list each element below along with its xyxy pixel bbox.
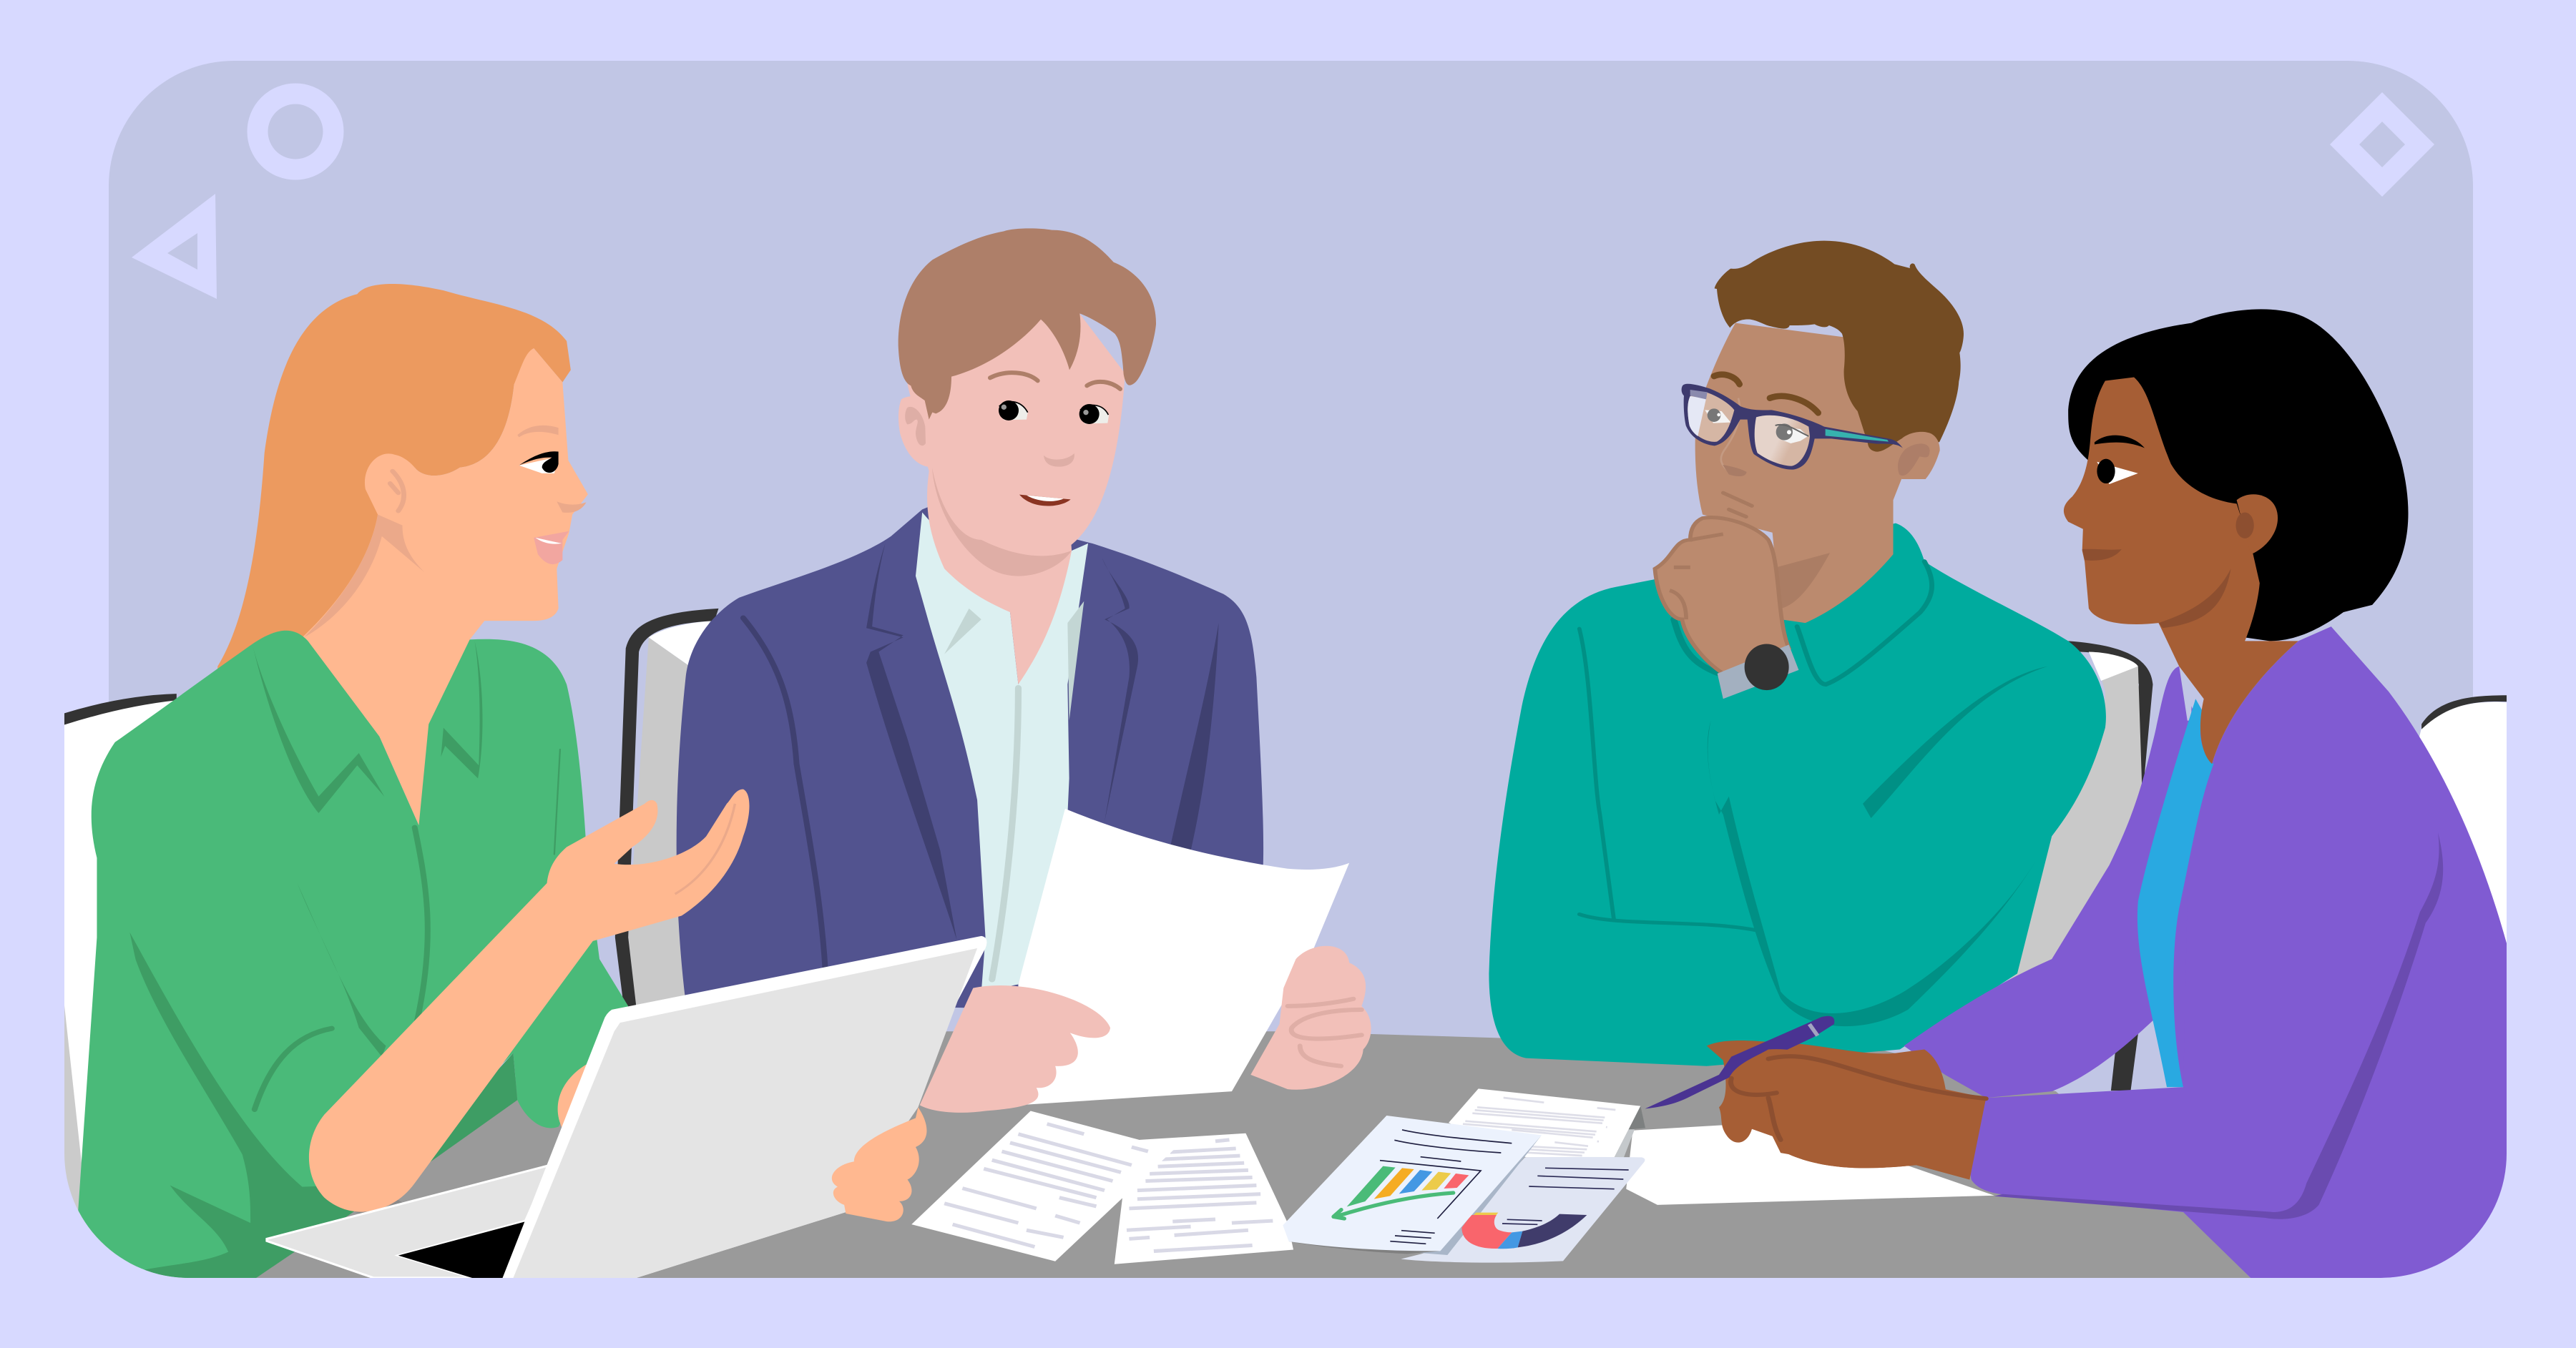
mouth — [2082, 549, 2122, 561]
pupil — [2097, 459, 2115, 483]
right highlight — [1787, 430, 1791, 434]
chest fold — [1863, 666, 2047, 818]
held paper — [1018, 809, 1349, 1105]
pointing hand — [920, 985, 1110, 1113]
eyebrows — [1714, 375, 1818, 413]
shirt creases — [255, 749, 560, 1109]
left eye white — [999, 403, 1028, 420]
mouth — [1019, 495, 1071, 506]
document: stack with charts — [1283, 1088, 1645, 1263]
left chair — [64, 694, 177, 1254]
person: man in blue jacket — [677, 228, 1263, 1010]
document: left pair — [911, 1111, 1293, 1264]
eye white — [519, 457, 559, 473]
decoration: ring — [258, 94, 333, 169]
raised arm and hand — [309, 789, 750, 1212]
donut: blue — [1497, 1231, 1522, 1249]
donut sheet — [1401, 1157, 1645, 1263]
palm crease — [675, 804, 735, 894]
bar: green — [1347, 1166, 1396, 1206]
knuckle lines — [1731, 1056, 1986, 1140]
right eye — [1778, 427, 1808, 443]
upper lid — [1776, 425, 1808, 436]
hand on chin — [1655, 518, 1789, 674]
upper lids — [999, 402, 1108, 415]
shirt placket — [992, 688, 1018, 979]
chin shadow — [2159, 569, 2231, 628]
watch face — [1745, 644, 1789, 690]
shirt — [78, 631, 628, 1278]
nose shadow — [557, 501, 587, 513]
back hand — [1707, 1040, 1986, 1179]
donut: yellow — [1474, 1213, 1498, 1215]
left lapel fold — [866, 543, 956, 940]
right pupil — [1079, 404, 1100, 424]
table — [256, 1031, 2251, 1278]
person: woman in purple — [1645, 309, 2507, 1278]
right iris — [1776, 423, 1793, 441]
keyboard gap — [398, 1221, 526, 1278]
far right chair — [2419, 695, 2507, 943]
top sheet text lines — [1463, 1098, 1615, 1156]
ear — [1901, 432, 1940, 479]
top sheet shadow — [1629, 1106, 1645, 1129]
body and face — [1489, 323, 2106, 1066]
cardigan fold — [1994, 832, 2443, 1219]
eye lid and pupil — [519, 451, 559, 473]
donut sheet text lines — [1502, 1168, 1629, 1224]
left highlight — [1001, 405, 1007, 410]
hair — [898, 228, 1156, 420]
lid frame — [503, 936, 986, 1278]
laptop — [267, 936, 986, 1278]
right lapel fold — [1102, 558, 1138, 822]
body — [677, 308, 1263, 1010]
white sheet under hands — [1626, 1122, 1994, 1205]
neck and face — [1695, 323, 1920, 623]
top — [2137, 699, 2213, 1087]
head details — [1682, 241, 1964, 479]
ear inner — [1898, 443, 1930, 476]
eyebrows — [990, 373, 1120, 389]
lid face — [513, 948, 977, 1278]
left highlight — [1717, 413, 1720, 416]
cardigan left panel — [1904, 666, 2188, 1098]
middle chair — [615, 609, 718, 1010]
eye white — [2097, 462, 2138, 484]
eyebrow — [2095, 436, 2145, 448]
left pupil — [999, 400, 1019, 420]
hair — [217, 284, 571, 677]
shirt — [916, 512, 1088, 992]
nose — [1721, 398, 1740, 473]
collar shading — [944, 601, 1084, 721]
hair — [1715, 241, 1964, 452]
left lens top — [1690, 390, 1708, 399]
jacket — [677, 503, 1263, 1010]
long sleeve fold — [1708, 721, 2035, 1026]
teeth — [1027, 496, 1064, 501]
cardigan back fill — [2153, 721, 2204, 1087]
left lens — [1688, 392, 1734, 442]
far hand — [558, 1064, 587, 1129]
ear — [898, 396, 932, 467]
nostril — [1723, 465, 1747, 476]
finger lines — [1670, 534, 1723, 619]
sweater — [1489, 523, 2106, 1066]
watch band — [1718, 644, 1798, 699]
left eye — [1705, 410, 1730, 423]
scene — [57, 228, 2507, 1284]
glasses frame — [1682, 384, 1903, 470]
face and neck — [302, 348, 588, 825]
trend arrow — [1333, 1193, 1454, 1219]
person: man in teal sweater — [1489, 241, 2106, 1066]
left iris — [1708, 408, 1720, 422]
cardigan body and sleeve — [1970, 626, 2507, 1278]
chart sheet — [1283, 1116, 1542, 1251]
neck shadow — [1776, 553, 1830, 609]
top sheet — [1449, 1088, 1640, 1157]
eyebrow — [517, 425, 559, 437]
decoration: diamond — [2330, 92, 2434, 197]
nose — [1044, 453, 1074, 467]
top sheet edge shadow — [1615, 1129, 1635, 1157]
teeth — [535, 538, 562, 544]
sleeve crease — [743, 618, 826, 970]
face details — [898, 228, 1156, 506]
front hand — [1729, 1049, 1986, 1179]
face and neck — [2064, 377, 2298, 764]
right eye white — [1079, 405, 1109, 424]
hair — [2068, 309, 2408, 641]
bar: yellow — [1421, 1172, 1451, 1191]
temple inlay — [1826, 429, 1889, 442]
keyboard base — [267, 1165, 550, 1278]
head — [907, 308, 1125, 558]
donut: navy — [1518, 1214, 1587, 1247]
bar: red — [1444, 1174, 1469, 1189]
neck shadow — [932, 468, 1072, 576]
right lens — [1755, 415, 1810, 466]
person: woman in green — [78, 284, 750, 1278]
ear inner — [905, 407, 926, 446]
mouth lines — [1723, 493, 1752, 517]
sweater folds — [1580, 561, 1932, 930]
pen — [1645, 1016, 1834, 1108]
right highlight — [1083, 410, 1089, 415]
bar: orange — [1374, 1168, 1414, 1199]
bar: blue — [1399, 1170, 1432, 1194]
hand on laptop — [832, 1107, 926, 1221]
donut: red — [1461, 1215, 1512, 1249]
chart sheet bottom shadow — [1289, 1241, 1440, 1254]
left lens glare — [1688, 396, 1706, 436]
shirt folds — [129, 641, 517, 1278]
neck — [927, 468, 1072, 684]
man three chair — [2011, 641, 2153, 1091]
ear — [2237, 494, 2278, 554]
chart sheet lines — [1380, 1130, 1512, 1244]
ear inner — [2235, 512, 2254, 538]
elbow shadow — [353, 1198, 404, 1216]
decoration: triangle — [132, 194, 217, 299]
holding hand — [1250, 946, 1371, 1090]
ear detail — [390, 471, 404, 511]
right jacket crease — [1170, 623, 1219, 851]
chart sheet side shadow — [1416, 1135, 1542, 1255]
mouth — [534, 531, 569, 564]
neck shadow — [304, 514, 424, 637]
pen band — [1809, 1024, 1818, 1035]
